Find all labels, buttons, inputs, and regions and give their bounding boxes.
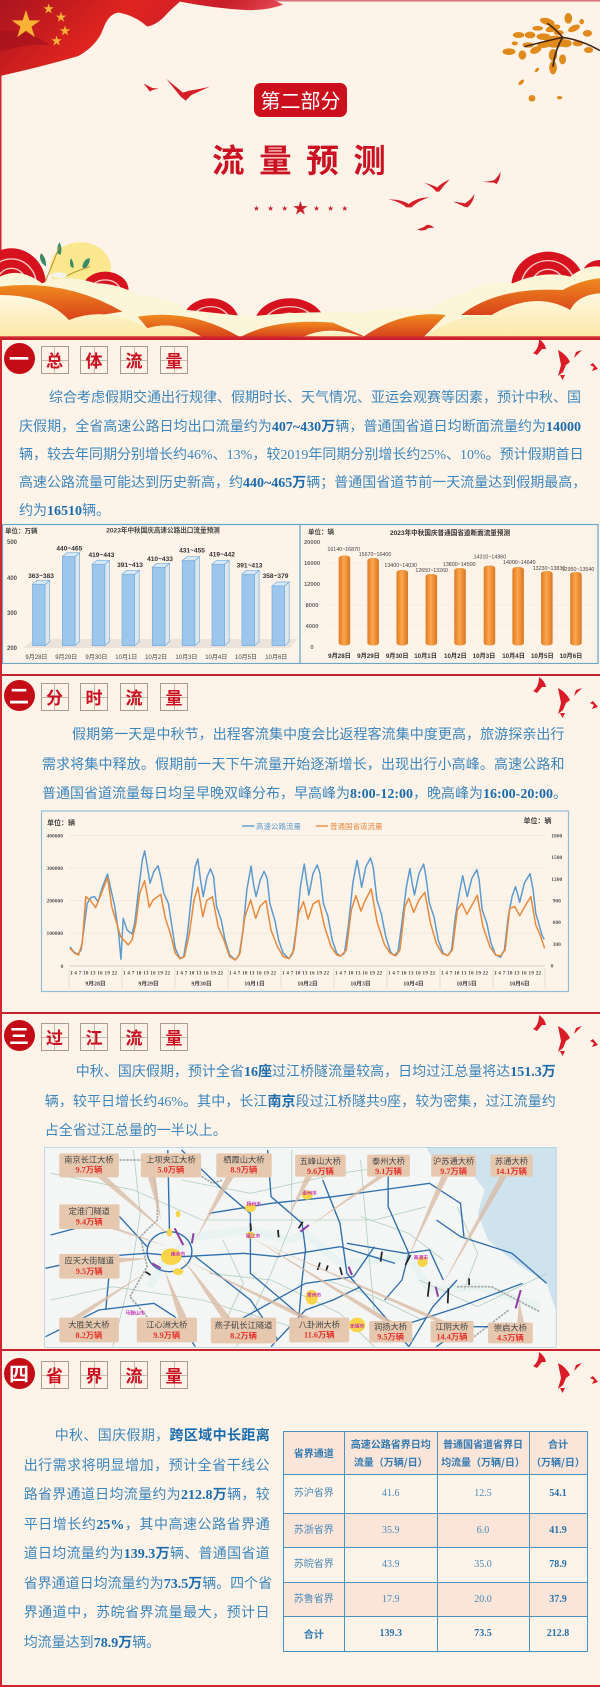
label: 大胜关大桥: 8.2万辆: [75, 1330, 102, 1340]
label: 沪苏通大桥: 沪苏通大桥: [433, 1156, 474, 1166]
icon: red birds: [533, 1015, 598, 1056]
label: 大胜关大桥: [59, 1318, 119, 1342]
chart: national and provincial road flow bars: 12000: [304, 582, 320, 588]
chart: national and provincial road flow bars: 4000: [306, 624, 318, 630]
label: 润扬大桥: 润扬大桥: [374, 1321, 407, 1331]
chart: national and provincial road flow bars: 9月28日: [328, 653, 351, 660]
chart: expressway exit flow bars: 10月5日: [235, 654, 257, 661]
chart: expressway exit flow bars: 9月28日: [25, 654, 47, 661]
chart: expressway exit flow bars: 2023年中秋国庆高速公路出口流量预测: [106, 526, 220, 534]
chart: national and provincial road flow bars: 8000: [306, 603, 318, 609]
label: 上坝夹江大桥: [141, 1153, 201, 1177]
table: border flow: 12.5: [474, 1488, 492, 1499]
line: national and provincial roads: [70, 877, 545, 960]
bar value labels: 391~413: [237, 562, 263, 570]
cylinder value labels: 13400~14030: [384, 563, 417, 569]
table: border flow: 苏皖省界: [294, 1559, 334, 1570]
label: 五峰山大桥: [295, 1155, 346, 1177]
body text: 高速公路流量可能达到历史新高，约440~465万辆；普通国省道节前一天流量达到假期最高，: [19, 476, 586, 491]
body text: 辆，较去年同期分别增长约46%、13%，较2019年同期分别增长约25%、10%。预计假期首日: [19, 448, 584, 463]
chart: national and provincial road flow bars: [299, 524, 599, 664]
section heading: 流: [126, 1362, 142, 1387]
section heading: 三: [9, 1020, 29, 1049]
bar value labels: 419~443: [88, 552, 115, 559]
label: 应天大街隧道: 9.5万辆: [76, 1266, 103, 1276]
hour labels: 1 4 7 10 13 16 19 22: [441, 972, 488, 976]
chart: expressway exit flow bars: 9月30日: [85, 654, 107, 661]
body text: 道日均流量约为139.3万辆、普通国省道: [24, 1547, 270, 1562]
section heading: 省: [46, 1362, 63, 1387]
panel: overall flow: [0, 338, 600, 674]
panel: hero banner: [0, 0, 600, 338]
chart: national and provincial road flow bars: 10月3日: [473, 653, 495, 660]
table: border flow: 73.5: [474, 1628, 492, 1639]
chart: expressway exit flow bars: 400: [7, 576, 18, 582]
section heading: 时: [86, 684, 102, 709]
chart: national and provincial road flow bars: 10月4日: [502, 653, 525, 660]
body text: 需求将集中释放。假期前一天下午流量开始逐渐增长，出现出行小高峰。高速公路和: [42, 758, 564, 773]
table: border flow: 苏鲁省界: [294, 1594, 334, 1605]
table: border flow: 41.9: [549, 1525, 567, 1536]
body text: 庆假期，全省高速公路日均出口流量约为407~430万辆，普通国省道日均断面流量约为14000: [19, 420, 581, 435]
chart: expressway exit flow bars: 单位：万辆: [5, 526, 38, 535]
left axis: 200000: [46, 898, 63, 904]
table: border flow: 流量（万辆/日）: [354, 1454, 428, 1469]
hero illustration: [0, 0, 600, 338]
table: border flow: 省界通道: [294, 1445, 334, 1460]
legend: 高速公路流量: [256, 821, 301, 831]
chart: national and provincial road flow bars: 10月2日: [444, 653, 467, 660]
city names: 常州市: [307, 1292, 322, 1299]
icon: red birds: [533, 339, 598, 380]
table: border flow: 37.9: [549, 1594, 567, 1605]
hour labels: 1 4 7 10 13 16 19 22: [494, 972, 542, 976]
autumn branch: [502, 13, 600, 102]
Yangtze river: [149, 1230, 540, 1307]
section heading: 体: [86, 347, 102, 372]
date labels: [85, 980, 530, 988]
cylinder value labels: [327, 547, 594, 574]
left axis: 300000: [46, 866, 63, 872]
bar value labels: 363~383: [28, 573, 54, 580]
date labels: 10月5日: [456, 980, 477, 988]
section heading: 分: [46, 684, 63, 709]
decorative star row: [254, 201, 348, 215]
city names: 无锡市: [350, 1322, 365, 1329]
body text: 约为16510辆。: [19, 504, 110, 519]
section heading: 二: [9, 680, 29, 709]
label: 江心洲大桥: 9.9万辆: [153, 1330, 180, 1340]
body text: [19, 390, 586, 519]
city names: 南通市: [414, 1254, 428, 1261]
chart: expressway exit flow bars: 10月3日: [175, 654, 197, 661]
body text: [24, 1428, 272, 1651]
chart: national and provincial road flow bars: 10月5日: [531, 653, 554, 660]
label: 泰州大桥: [367, 1155, 410, 1177]
chart: hourly flow lines: 单位：辆: [524, 816, 552, 825]
cylinder value labels: 14310~14960: [474, 554, 506, 560]
body text: 出行需求将明显增加，预计全省干线公: [24, 1459, 270, 1474]
icon: red birds: [533, 1352, 598, 1393]
label: 大胜关大桥: 大胜关大桥: [68, 1319, 110, 1329]
bar value labels: 440~465: [56, 546, 83, 552]
hour labels: 1 4 7 10 13 16 19 22: [335, 972, 382, 976]
table: border flow: 54.1: [549, 1488, 567, 1499]
chart: expressway exit flow bars: 9月29日: [55, 654, 77, 661]
left axis: 0: [61, 964, 64, 970]
red flag: [0, 0, 283, 76]
body text: 占全省过江总量的一半以上。: [45, 1124, 227, 1139]
date labels: 10月2日: [297, 980, 318, 988]
date labels: 10月4日: [403, 980, 424, 988]
table: border flow: [283, 1431, 588, 1652]
label: 八卦洲大桥: 八卦洲大桥: [299, 1319, 340, 1329]
hour labels: 1 4 7 10 13 16 19 22: [388, 972, 436, 976]
label: 崇启大桥: [488, 1323, 533, 1343]
label: 崇启大桥: 4.5万辆: [497, 1333, 524, 1343]
label: 定淮门隧道: [59, 1204, 120, 1229]
table: border flow: （万辆/日）: [531, 1454, 585, 1469]
city names: 马鞍山市: [125, 1309, 145, 1316]
chart: expressway exit flow bars: 10月4日: [205, 654, 227, 661]
hour labels: 1 4 7 10 13 16 19 22: [229, 972, 276, 976]
right axis: 300: [553, 942, 561, 948]
bar value labels: [28, 546, 289, 580]
bars: [32, 553, 289, 646]
section heading: 流: [126, 684, 142, 709]
right axis: 600: [553, 920, 561, 926]
leader wedges: [71, 1176, 524, 1323]
chart: expressway exit flow bars: 500: [7, 540, 18, 546]
right axis: 1500: [551, 855, 563, 861]
table: border flow: 78.9: [549, 1559, 567, 1570]
chart: expressway exit flow bars: 10月6日: [265, 654, 287, 661]
chart: expressway exit flow bars: 200: [7, 646, 18, 652]
cylinder value labels: 12950~13540: [562, 567, 594, 573]
body text: [42, 726, 567, 802]
label: 燕子矶长江隧道: 燕子矶长江隧道: [215, 1320, 272, 1330]
right axis: 1800: [551, 834, 563, 840]
section heading: 量: [166, 347, 182, 372]
table: border flow: 35.9: [382, 1525, 400, 1536]
thin roads: [51, 1150, 547, 1347]
label: 燕子矶长江隧道: 8.2万辆: [230, 1330, 257, 1340]
legend: 普通国省道流量: [330, 821, 383, 831]
label: 苏通大桥: [490, 1155, 533, 1177]
chart: national and provincial road flow bars: 9月30日: [386, 653, 409, 660]
date labels: 9月30日: [191, 980, 212, 988]
chart: expressway exit flow bars: 10月1日: [115, 654, 137, 661]
body text: 假期第一天是中秋节，出程客流集中度会比返程客流集中度更高，旅游探亲出行: [72, 728, 564, 743]
date labels: 10月3日: [350, 980, 371, 988]
cylinders: [339, 556, 582, 646]
table: border flow: 合计: [548, 1436, 568, 1451]
chart: hourly flow lines: 单位：辆: [47, 818, 75, 827]
table: border flow: 139.3: [380, 1628, 402, 1639]
right axis: [551, 834, 563, 970]
body text: 路省界通道日均流量约为212.8万辆，较: [24, 1488, 270, 1503]
label: 江阴大桥: [431, 1321, 474, 1342]
cylinder value labels: 13230~13830: [533, 566, 565, 572]
section heading: [4, 1358, 188, 1389]
label: 燕子矶长江隧道: [211, 1318, 276, 1343]
date labels: 9月28日: [85, 980, 106, 988]
right axis: 900: [553, 898, 561, 904]
cylinder value labels: 15670~16400: [359, 552, 391, 558]
line: expressway: [70, 851, 544, 960]
hour labels: 1 4 7 10 13 16 19 22: [70, 972, 118, 976]
section heading: 流: [126, 1024, 142, 1049]
label: 南京长江大桥: 南京长江大桥: [64, 1155, 114, 1165]
chart: national and provincial road flow bars: 0: [310, 645, 314, 651]
label: 沪苏通大桥: 9.7万辆: [440, 1166, 467, 1176]
bar value labels: 419~442: [209, 552, 235, 558]
right axis: 1200: [551, 877, 563, 883]
cylinder value labels: 14000~14640: [503, 560, 536, 566]
body text: 辆，较平日增长约46%。其中，长江南京段过江桥隧共9座，较为密集，过江流量约: [45, 1095, 556, 1110]
city names: [125, 1189, 428, 1329]
clouds and fans: [0, 242, 600, 352]
section heading: 量: [166, 1024, 182, 1049]
city names: 泰州市: [302, 1189, 317, 1196]
city names: 南京市: [171, 1251, 186, 1258]
bridge markers: [152, 1225, 521, 1308]
table: border flow: 20.0: [474, 1594, 492, 1605]
chart: national and provincial road flow bars: 9月29日: [357, 653, 380, 660]
panel: river crossing flow: [0, 1012, 600, 1349]
table: border flow: 均流量（万辆/日）: [441, 1454, 525, 1469]
section heading: 过: [46, 1024, 63, 1049]
body text: 省界通道日均流量约为73.5万辆。四个省: [24, 1577, 272, 1592]
section heading: 量: [166, 1362, 182, 1387]
label: 泰州大桥: 泰州大桥: [372, 1156, 405, 1166]
label: 五峰山大桥: 五峰山大桥: [300, 1156, 341, 1166]
left axis: 400000: [46, 834, 63, 840]
bar value labels: 410~433: [147, 556, 173, 563]
body text: 界通道中，苏皖省界流量最大，预计日: [24, 1606, 270, 1621]
sea: [426, 1147, 557, 1313]
label: 上坝夹江大桥: 上坝夹江大桥: [146, 1155, 196, 1165]
body text: 平日增长约25%，其中高速公路省界通: [24, 1518, 270, 1533]
date labels: 10月1日: [244, 980, 265, 988]
body text: 普通国省道流量每日均呈早晚双峰分布，早高峰为8:00-12:00，晚高峰为16:00-20:00。: [42, 787, 567, 802]
label: 泰州大桥: 9.1万辆: [375, 1166, 402, 1176]
chart: national and provincial road flow bars: 10月1日: [414, 653, 437, 660]
province border: [109, 1160, 540, 1337]
body text: 均流量达到78.9万辆。: [24, 1636, 160, 1651]
label: 定淮门隧道: 定淮门隧道: [69, 1206, 110, 1216]
chart: national and provincial road flow bars: 2023年中秋国庆普通国省道断面流量预测: [390, 528, 510, 537]
table: border flow: 212.8: [547, 1628, 569, 1639]
table: border flow: 43.9: [382, 1559, 400, 1570]
table: border flow: 高速公路省界日均: [351, 1436, 431, 1451]
label: 苏通大桥: 苏通大桥: [495, 1156, 528, 1166]
panel: provincial border flow: [0, 1349, 600, 1687]
label: 栖霞山大桥: 8.9万辆: [230, 1165, 257, 1175]
chart: national and provincial road flow bars: 10月6日: [560, 653, 582, 660]
chart: hourly flow lines: [40, 810, 570, 992]
label: 栖霞山大桥: 栖霞山大桥: [223, 1155, 265, 1165]
cities: [161, 1190, 428, 1332]
table: border flow: 6.0: [477, 1525, 489, 1536]
label: 润扬大桥: [369, 1321, 412, 1342]
section heading: 界: [86, 1362, 102, 1387]
section heading: 一: [9, 343, 29, 372]
chart: national and provincial road flow bars: 16000: [304, 561, 320, 567]
left axis: [46, 834, 64, 970]
label: 苏通大桥: 14.1万辆: [496, 1166, 527, 1176]
icon: red birds: [533, 677, 598, 718]
table: border flow: 合计: [304, 1626, 324, 1641]
table: border flow: 苏浙省界: [294, 1525, 334, 1536]
city names: 镇江市: [246, 1232, 261, 1239]
section heading: [4, 343, 188, 374]
map: river crossings: [44, 1147, 557, 1348]
body text: 中秋、国庆假期，跨区域中长距离: [55, 1429, 270, 1444]
body text: 综合考虑假期交通出行规律、假期时长、天气情况、亚运会观赛等因素，预计中秋、国: [49, 391, 581, 406]
cylinder value labels: 16140~16870: [327, 547, 360, 553]
table: border flow: 苏沪省界: [294, 1488, 334, 1499]
chart: expressway exit flow bars: [2, 524, 300, 664]
main roads: [45, 1150, 547, 1347]
table: border flow: 普通国省道省界日: [443, 1436, 523, 1451]
bar value labels: 431~455: [179, 548, 205, 554]
label: 江心洲大桥: 江心洲大桥: [146, 1319, 187, 1329]
table: border flow: 41.6: [382, 1488, 400, 1499]
label: 南京长江大桥: [59, 1153, 119, 1177]
label: 润扬大桥: 9.5万辆: [377, 1331, 404, 1341]
label: 五峰山大桥: 9.6万辆: [307, 1166, 334, 1176]
flying birds: [144, 79, 501, 231]
tunnel markers: [145, 1222, 469, 1303]
bar value labels: 358~379: [263, 573, 289, 580]
left axis: 100000: [46, 931, 63, 937]
label: 江心洲大桥: [137, 1318, 197, 1342]
date labels: 9月29日: [138, 980, 159, 988]
right axis: 0: [551, 964, 554, 970]
body text: [45, 1064, 556, 1139]
label: 沪苏通大桥: [431, 1155, 476, 1177]
title: 流量预测: [212, 135, 400, 182]
hour labels: 1 4 7 10 13 16 19 22: [282, 972, 330, 976]
label: 应天大街隧道: [59, 1254, 120, 1279]
section heading: [4, 1020, 188, 1051]
city names: 扬州市: [247, 1200, 261, 1207]
chart: national and provincial road flow bars: 20000: [304, 540, 320, 546]
bar value labels: 391~413: [117, 562, 143, 569]
label: 八卦洲大桥: [289, 1318, 349, 1342]
label: 栖霞山大桥: [216, 1153, 272, 1177]
label: 应天大街隧道: 应天大街隧道: [64, 1256, 114, 1266]
label: 上坝夹江大桥: 5.0万辆: [157, 1165, 184, 1175]
hour labels: 1 4 7 10 13 16 19 22: [123, 972, 170, 976]
section heading: 江: [86, 1024, 102, 1049]
date labels: 10月6日: [509, 980, 530, 988]
section heading: 四: [9, 1358, 29, 1387]
label: 定淮门隧道: 9.4万辆: [76, 1216, 103, 1226]
body text: 中秋、国庆假期，预计全省16座过江桥隧流量较高，日均过江总量将达151.3万: [76, 1065, 556, 1080]
section heading: 量: [166, 684, 182, 709]
table: border flow: 17.9: [382, 1594, 400, 1605]
chart: expressway exit flow bars: 300: [7, 611, 18, 617]
cylinder value labels: 13800~14500: [443, 562, 476, 568]
label: 江阴大桥: 江阴大桥: [435, 1321, 468, 1331]
hour labels: 1 4 7 10 13 16 19 22: [176, 972, 224, 976]
panel: hourly flow: [0, 674, 600, 1012]
frame lines: [0, 0, 600, 338]
section badge: 第二部分: [260, 85, 340, 114]
hour labels: [70, 972, 542, 976]
label: 江阴大桥: 14.4万辆: [436, 1331, 467, 1341]
section heading: [4, 680, 188, 711]
cylinder value labels: 12650~13260: [415, 568, 448, 574]
chart: expressway exit flow bars: 10月2日: [145, 654, 167, 661]
legend: [242, 821, 383, 831]
table: border flow: 35.0: [474, 1559, 492, 1570]
label: 南京长江大桥: 9.7万辆: [75, 1165, 102, 1175]
section heading: 流: [126, 347, 142, 372]
label: 八卦洲大桥: 11.6万辆: [304, 1330, 335, 1340]
chart: national and provincial road flow bars: 单位：辆: [308, 527, 334, 536]
section heading: 总: [46, 347, 63, 372]
label: 崇启大桥: 崇启大桥: [494, 1323, 527, 1333]
